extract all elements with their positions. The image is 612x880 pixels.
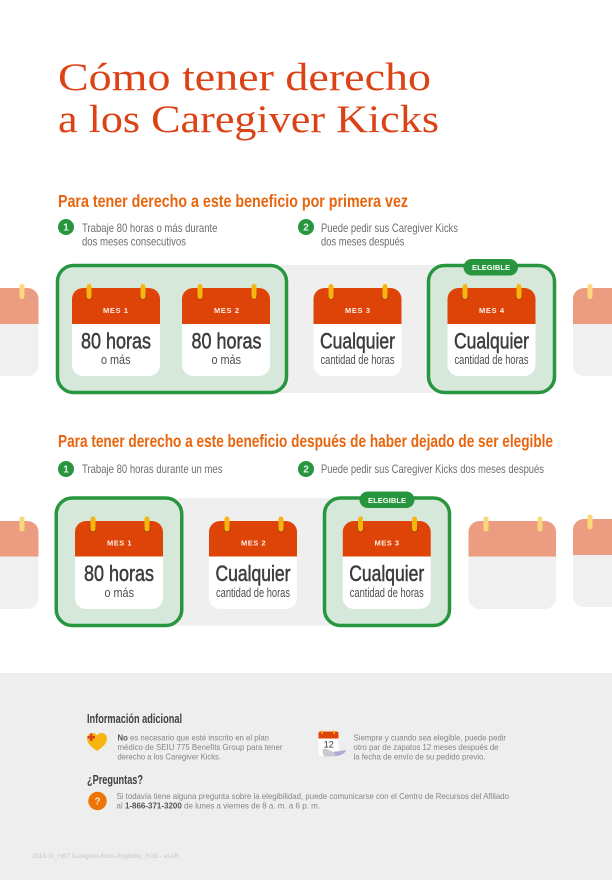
step 2: returning: 2 xyxy=(303,464,309,476)
calendar: mes 2: o más xyxy=(212,352,241,367)
badge: elegible: ELEGIBLE xyxy=(472,263,510,272)
step 1: first time: Trabaje 80 horas o más durante xyxy=(82,221,218,235)
icon: calendar with shoe: 12 xyxy=(324,740,334,750)
footer panel: otro par de zapatos 12 meses después de xyxy=(354,743,499,752)
calendar: mes 1: o más xyxy=(101,352,131,367)
calendar: mes 1: MES 1 xyxy=(103,306,128,315)
footer panel: la fecha de envío de su pedido previo. xyxy=(354,752,486,762)
step 2: first time: dos meses después xyxy=(321,234,404,248)
calendar: mes 1: 80 horas xyxy=(81,328,151,354)
calendar: mes 2: MES 2 xyxy=(214,306,239,315)
heading: first time: Para tener derecho a este beneficio por primera vez xyxy=(58,191,408,211)
eligible box months 1-2 xyxy=(58,266,286,392)
badge: elegible xyxy=(360,492,414,508)
calendar: mes 3: cantidad de horas xyxy=(320,352,395,367)
step 2: first time xyxy=(298,219,458,248)
faded calendar xyxy=(468,516,556,609)
footer panel: al 1-866-371-3200 de lunes a viernes de 8 a. m. a 6 p. m. xyxy=(116,802,320,810)
badge: elegible: ELEGIBLE xyxy=(368,496,406,505)
step 1: first time: 1 xyxy=(63,222,69,234)
title: a los Caregiver Kicks xyxy=(58,98,439,141)
badge: elegible xyxy=(464,259,518,276)
calendar: mes 4: cantidad de horas xyxy=(454,352,529,367)
calendar: mes 3: cantidad de horas xyxy=(350,585,424,600)
footer panel: derecho a los Caregiver Kicks. xyxy=(118,752,221,762)
text: plan note: No es necesario que esté inscrito en el plan xyxy=(118,734,269,742)
timeline: returning xyxy=(0,492,612,626)
text: shoes note: Siempre y cuando sea elegible, puede pedir xyxy=(354,734,506,742)
faded calendar right xyxy=(573,514,612,607)
step 1: first time xyxy=(58,219,218,248)
step 1: returning: 1 xyxy=(63,464,69,476)
step 1: returning: Trabaje 80 horas durante un mes xyxy=(82,462,222,476)
icon: heart with cross xyxy=(87,733,107,751)
gray band xyxy=(175,498,330,626)
calendar: mes 3: Cualquier xyxy=(349,561,424,586)
calendar: mes 3 xyxy=(343,516,431,609)
timeline: first time xyxy=(0,259,612,393)
heading: questions: ¿Preguntas? xyxy=(87,772,143,787)
file reference: 2019.01_HBT Caregiver-Kicks-Eligibility_RGB - esAR xyxy=(32,854,180,860)
calendar: mes 2 xyxy=(182,284,270,376)
step 1: returning xyxy=(58,461,222,477)
calendar: mes 3: Cualquier xyxy=(320,328,395,354)
calendar: mes 4: MES 4 xyxy=(479,306,505,315)
calendar: mes 1 xyxy=(72,284,160,376)
calendar: mes 3: MES 3 xyxy=(345,306,370,315)
footer panel xyxy=(0,673,612,880)
faded calendar left xyxy=(0,516,38,609)
step 2: first time: Puede pedir sus Caregiver Kicks xyxy=(321,221,458,235)
eligible box month 3 xyxy=(324,498,450,626)
icon: question mark: ? xyxy=(94,796,101,808)
calendar: mes 2: Cualquier xyxy=(216,561,290,586)
eligible box month 1 xyxy=(56,498,182,626)
step 2: first time: 2 xyxy=(303,222,309,234)
text: contact: Si todavía tiene alguna pregunta sobre la elegibilidad, puede comunicarse con el Centro de Recursos del Afiliado xyxy=(116,792,509,801)
step 2: returning: Puede pedir sus Caregiver Kicks dos meses después xyxy=(321,462,544,476)
calendar: mes 2: 80 horas xyxy=(192,328,262,354)
calendar: mes 2 xyxy=(209,516,297,609)
title xyxy=(58,56,439,141)
step 1: first time: dos meses consecutivos xyxy=(82,234,186,248)
gray band xyxy=(280,265,435,393)
eligible box month 4 xyxy=(428,266,554,392)
faded calendar left xyxy=(0,284,38,376)
faded calendar right xyxy=(573,284,612,376)
icon: calendar with shoe xyxy=(318,730,346,756)
icon: question mark xyxy=(88,792,107,810)
calendar: mes 4: Cualquier xyxy=(454,328,529,354)
step 2: returning xyxy=(298,461,544,477)
calendar: mes 3: MES 3 xyxy=(374,538,399,548)
calendar: mes 1: o más xyxy=(104,585,134,600)
calendar: mes 1: 80 horas xyxy=(84,561,154,586)
footer panel: médico de SEIU 775 Benefits Group para tener xyxy=(118,743,283,752)
calendar: mes 3 xyxy=(314,284,402,376)
title: Cómo tener derecho xyxy=(58,56,431,99)
heading: additional information: Información adicional xyxy=(87,711,182,726)
calendar: mes 1 xyxy=(75,516,163,609)
calendar: mes 4 xyxy=(448,284,536,376)
calendar: mes 1: MES 1 xyxy=(107,538,132,548)
calendar: mes 2: MES 2 xyxy=(241,538,266,548)
calendar: mes 2: cantidad de horas xyxy=(216,585,290,600)
